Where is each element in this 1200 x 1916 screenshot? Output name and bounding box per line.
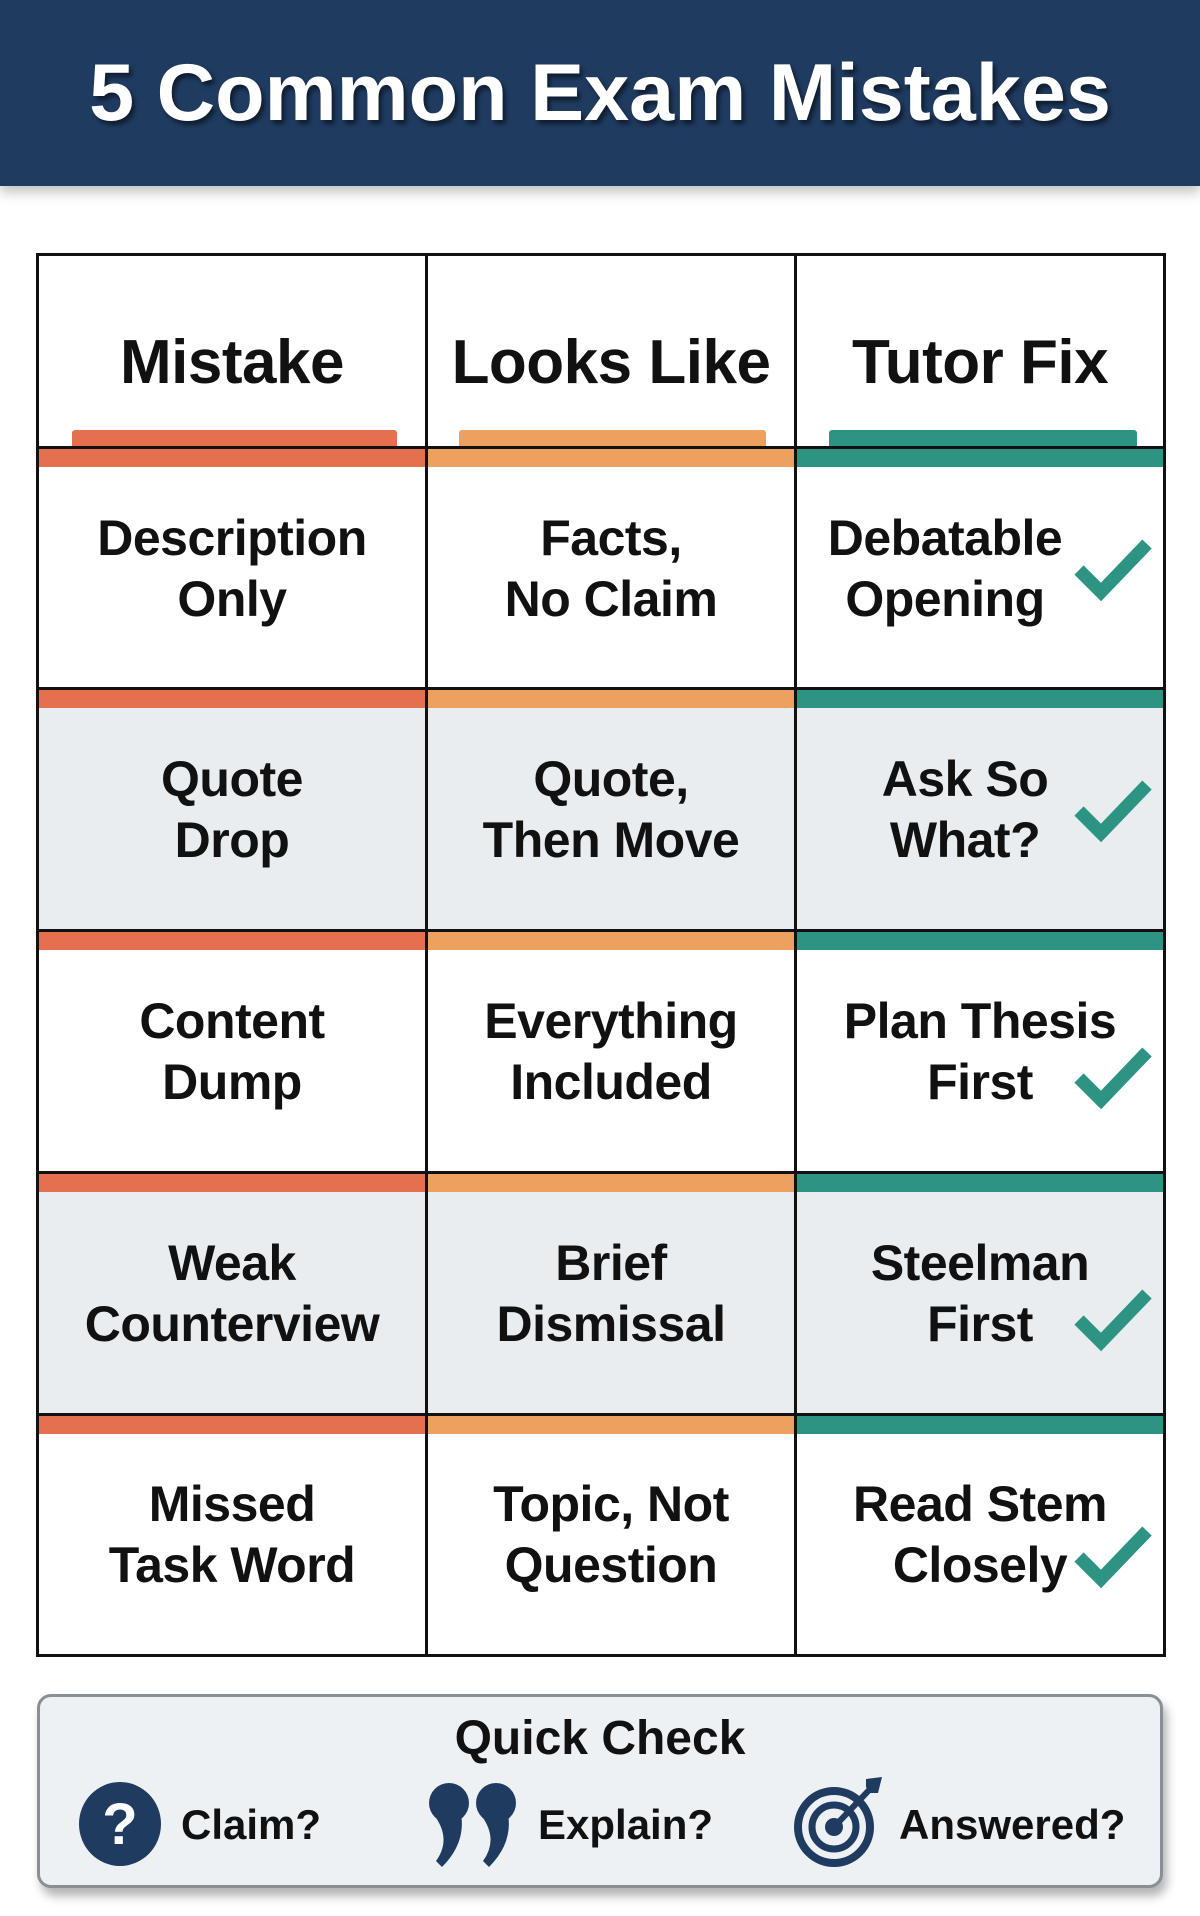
looks like 2: Quote, — [533, 750, 689, 806]
column heading: Mistake: Mistake — [120, 328, 344, 397]
icon: check 2 — [1074, 780, 1152, 842]
row 5 — [39, 1416, 1163, 1654]
fix 3: Plan Thesis — [844, 992, 1116, 1048]
mistake 3 — [39, 932, 428, 1171]
mistake 2 — [39, 690, 428, 929]
fix 4: Steelman — [871, 1234, 1089, 1290]
table — [36, 253, 1166, 1657]
fix 2: Ask So — [882, 750, 1048, 806]
icon: check 5 — [1074, 1526, 1152, 1588]
quick check heading: Quick Check — [455, 1712, 745, 1765]
fix 4 — [871, 1234, 1089, 1352]
column heading: Mistake — [39, 256, 428, 446]
fix 5: Read Stem — [853, 1476, 1107, 1532]
looks like 2: Then Move — [483, 812, 739, 868]
looks like 3: Everything — [484, 992, 738, 1048]
looks like 3 — [428, 932, 797, 1171]
looks like 3: Included — [510, 1054, 712, 1110]
mistake 4: Weak — [168, 1234, 296, 1290]
mistake 3: Dump — [162, 1054, 302, 1110]
mistake 5: Task Word — [109, 1537, 355, 1593]
mistake 5: Missed — [149, 1476, 315, 1532]
row 2 — [39, 690, 1163, 929]
mistake 1: Only — [177, 570, 287, 626]
fix 2 — [882, 750, 1048, 868]
fix 1 — [828, 510, 1062, 626]
column heading: Looks Like: Looks Like — [452, 328, 770, 397]
label: Answered?: Answered? — [899, 1801, 1125, 1848]
fix 1: Opening — [845, 570, 1045, 626]
panel: quick check — [37, 1694, 1163, 1888]
fix 5 — [853, 1476, 1107, 1593]
looks like 1 — [428, 449, 797, 688]
looks like 4 — [428, 1174, 797, 1413]
looks like 2 — [428, 690, 797, 929]
fix 3 — [844, 992, 1116, 1110]
looks like 5: Question — [505, 1537, 717, 1593]
mistake 2: Quote — [161, 750, 303, 806]
row 3 — [39, 932, 1163, 1171]
icon: check 3 — [1074, 1048, 1152, 1110]
row 4 — [39, 1174, 1163, 1413]
mistake 5 — [39, 1416, 428, 1654]
fix 2: What? — [890, 812, 1040, 868]
looks like 4: Dismissal — [496, 1296, 725, 1352]
title: 5 Common Exam Mistakes — [89, 48, 1111, 138]
header row — [72, 256, 1137, 446]
icon: check 4 — [1074, 1290, 1152, 1352]
column heading: Looks Like — [428, 256, 797, 446]
mistake 1: Description — [97, 510, 367, 566]
mistake 2: Drop — [175, 812, 289, 868]
fix 5: Closely — [893, 1537, 1067, 1593]
looks like 4: Brief — [555, 1234, 667, 1290]
icon: target — [794, 1777, 882, 1867]
looks like 1: Facts, — [540, 510, 682, 566]
icon: question mark: ? — [102, 1792, 138, 1857]
row 1 — [39, 449, 1163, 688]
mistake 4 — [39, 1174, 428, 1413]
mistake 3: Content — [139, 992, 325, 1048]
mistake 1 — [39, 449, 428, 688]
looks like 5 — [428, 1416, 797, 1654]
header banner — [0, 0, 1200, 186]
fix 4: First — [927, 1296, 1033, 1352]
label: Explain?: Explain? — [538, 1801, 713, 1848]
looks like 1: No Claim — [505, 570, 717, 626]
label: Claim?: Claim? — [181, 1801, 321, 1848]
fix 1: Debatable — [828, 510, 1062, 566]
icon: quotation marks — [429, 1783, 516, 1867]
fix 3: First — [927, 1054, 1033, 1110]
looks like 5: Topic, Not — [493, 1476, 729, 1532]
icon: check 1 — [1074, 540, 1152, 602]
column heading: Tutor Fix: Tutor Fix — [852, 328, 1108, 397]
mistake 4: Counterview — [85, 1296, 379, 1352]
icon: question mark — [79, 1782, 161, 1866]
